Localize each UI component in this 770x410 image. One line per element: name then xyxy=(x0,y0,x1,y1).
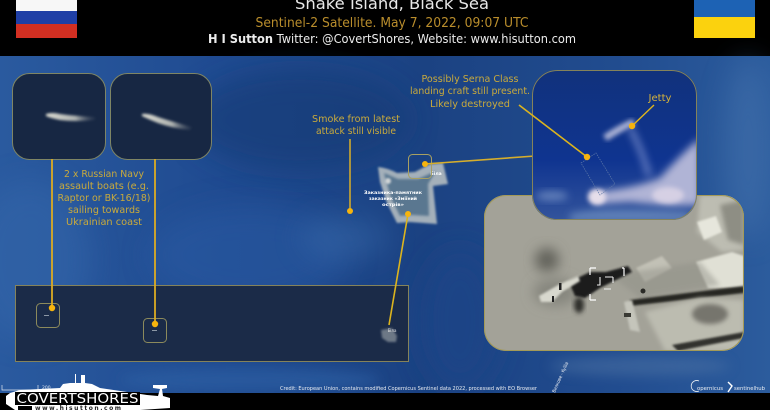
jetty inset xyxy=(532,70,700,222)
island xyxy=(378,163,448,224)
boat marker 1 xyxy=(36,159,60,328)
island Russian label xyxy=(364,190,423,208)
dark strip panel: Біла xyxy=(388,328,397,333)
landing craft label: Possibly Serna Class xyxy=(422,74,518,85)
landing craft outline xyxy=(581,153,615,195)
scale bar: 200 xyxy=(42,385,51,391)
island Russian label: острів» xyxy=(382,202,404,208)
boat marker 2 xyxy=(144,159,166,342)
scale bar xyxy=(2,385,51,391)
island small label: Біла xyxy=(430,171,442,177)
sentinelhub logo xyxy=(728,382,766,392)
header band xyxy=(0,0,770,57)
author credit: H I Sutton Twitter: @CovertShores, Website: www.hisutton.com xyxy=(208,31,576,46)
jetty pointer xyxy=(629,105,654,129)
flag: Russia xyxy=(16,0,77,38)
map label: place name: Вилкове - Kyliia xyxy=(551,361,570,394)
copernicus logo: opernicus xyxy=(697,386,723,392)
landing craft label: Likely destroyed xyxy=(430,99,510,110)
landing craft pointer xyxy=(519,105,590,160)
boats caption: Raptor or BK-16/18) xyxy=(58,193,150,204)
island Russian label: Заказника-памятник xyxy=(364,190,423,196)
landing craft label: landing craft still present. xyxy=(410,86,530,97)
data credit: Credit: European Union, contains modified Copernicus Sentinel data 2022, processed with EO Browser xyxy=(280,386,538,392)
boats caption: sailing towards xyxy=(68,205,140,216)
boats caption: Ukrainian coast xyxy=(66,217,142,228)
island pointer to strip xyxy=(389,211,411,325)
island Russian label: заказник «Зміїний xyxy=(369,195,417,202)
smoke label: Smoke from latest xyxy=(312,114,400,125)
bottom band xyxy=(0,393,770,410)
flag: Ukraine xyxy=(694,0,755,38)
jetty label: Jetty xyxy=(647,93,672,104)
boats caption xyxy=(58,169,150,228)
boats caption: 2 x Russian Navy xyxy=(64,169,144,180)
photo inset: damaged vessel xyxy=(484,195,744,351)
inset: boat 2 xyxy=(110,74,212,160)
boats caption: assault boats (e.g. xyxy=(59,181,149,192)
landing craft label xyxy=(410,74,530,110)
smoke pointer xyxy=(347,139,353,214)
subtitle: date: Sentinel-2 Satellite. May 7, 2022, 09:07 UTC xyxy=(256,16,528,31)
logo: CovertShores submarine: COVERTSHORES xyxy=(16,391,138,407)
dark strip panel xyxy=(16,286,408,362)
smoke label: attack still visible xyxy=(316,126,396,137)
jetty highlight box and pointer xyxy=(408,154,535,178)
smoke label xyxy=(312,114,400,137)
inset: boat 1 xyxy=(12,74,106,160)
sentinelhub logo: sentinelhub xyxy=(734,386,766,392)
copernicus logo xyxy=(691,381,723,392)
logo: CovertShores submarine xyxy=(6,374,170,410)
